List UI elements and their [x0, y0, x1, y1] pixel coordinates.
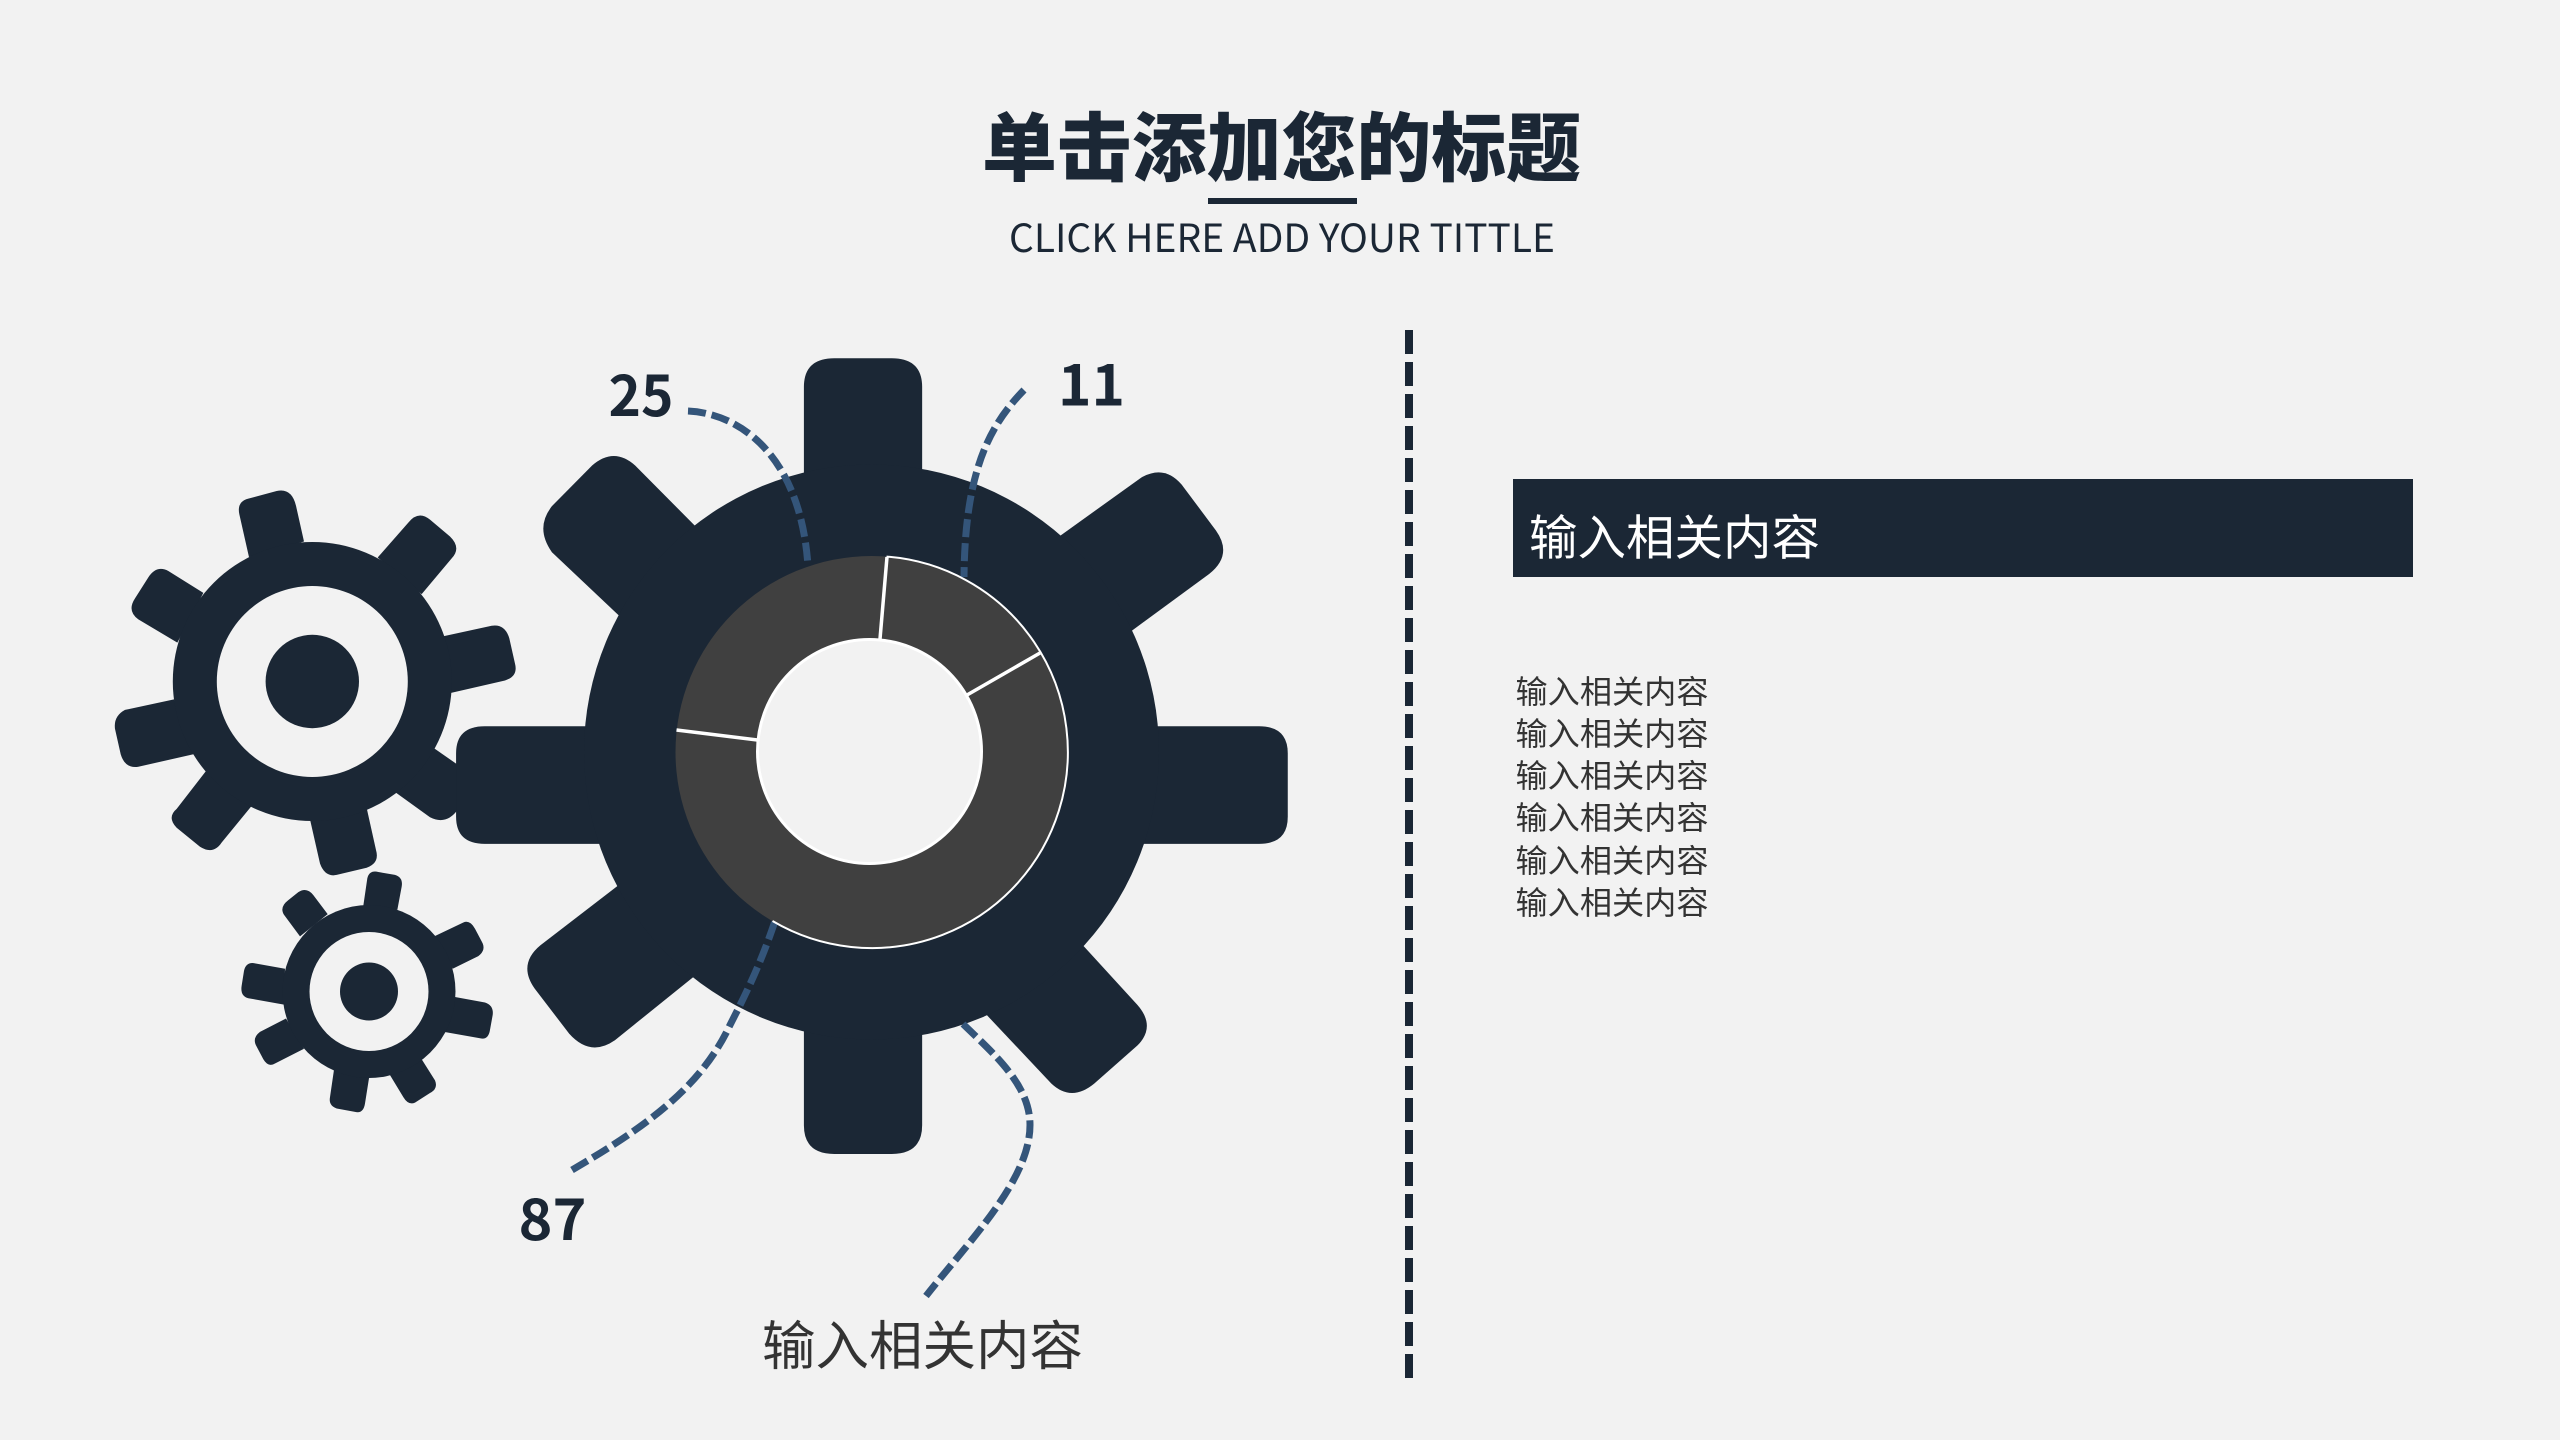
text block: list: 输入相关内容: [1516, 836, 1708, 882]
text block: list: [1516, 667, 1708, 924]
dashed leader: bottom label: [926, 1024, 1030, 1296]
panel: heading bar: [1513, 479, 2413, 577]
bottom label: 输入相关内容: [762, 1304, 1083, 1380]
dashed leader: 87: [572, 921, 775, 1170]
panel: heading bar: 输入相关内容: [1529, 498, 1820, 568]
text block: list: 输入相关内容: [1516, 878, 1708, 924]
dashed leader: 25: [688, 411, 808, 566]
value label: 87: 87: [518, 1176, 586, 1257]
subtitle: CLICK HERE ADD YOUR TITTLE: [1009, 208, 1555, 264]
text block: list: 输入相关内容: [1516, 667, 1708, 713]
donut chart: [676, 556, 1068, 948]
value label: 11: 11: [1058, 342, 1125, 422]
vertical dashed divider: [1405, 330, 1413, 1378]
text block: list: 输入相关内容: [1516, 751, 1708, 797]
icon: large gear: [456, 358, 1288, 1154]
title underline: [1208, 198, 1357, 204]
icon: small gear: [241, 872, 493, 1112]
text block: list: 输入相关内容: [1516, 709, 1708, 755]
title: 单击添加您的标题: [982, 88, 1581, 197]
icon: medium gear: [115, 491, 516, 875]
text block: list: 输入相关内容: [1516, 793, 1708, 839]
dashed leader: 11: [964, 390, 1024, 577]
value label: 25: 25: [608, 352, 674, 433]
